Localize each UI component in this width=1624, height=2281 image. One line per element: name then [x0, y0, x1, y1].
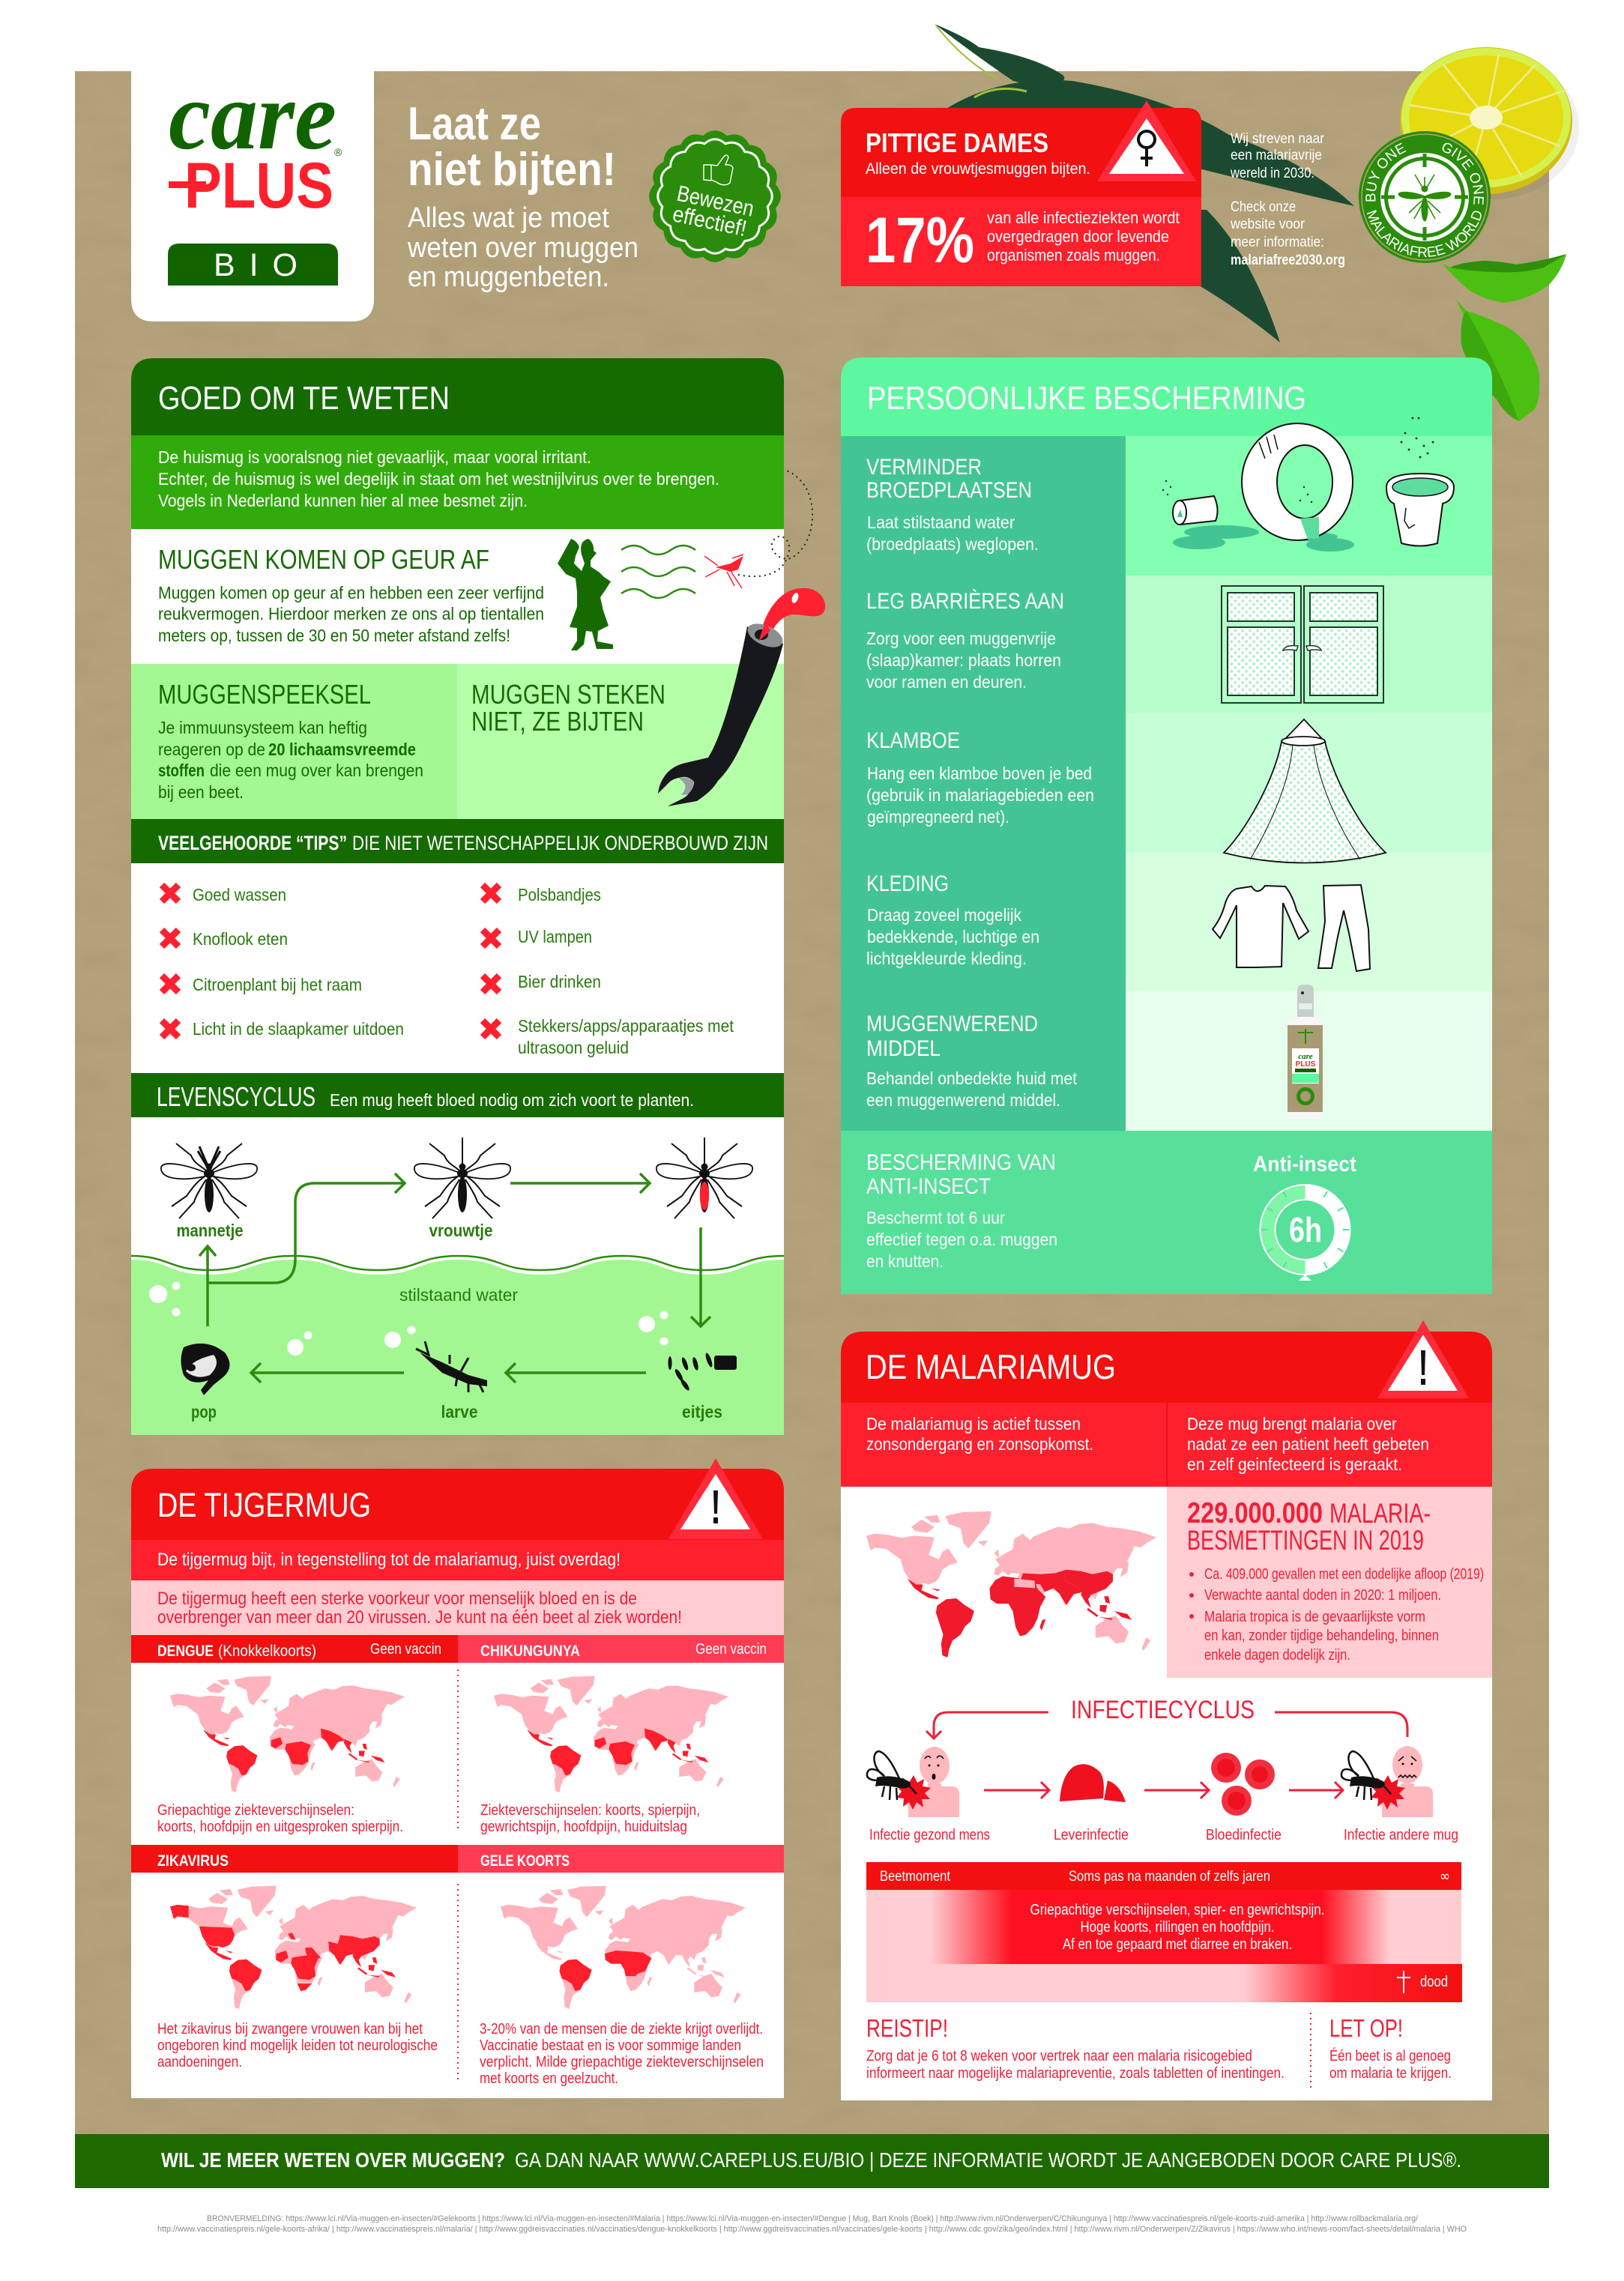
text: malariafree 2030: meer informatie:	[1231, 235, 1324, 250]
disease: zikavirus: ZIKAVIRUS	[157, 1852, 229, 1870]
panel: goed om te weten	[131, 358, 825, 1435]
labels: stilstaand water	[399, 1285, 518, 1305]
item: bescherming anti-insect	[841, 1131, 1492, 1294]
intro text: Echter, de huismug is wel degelijk in staat om het westnijlvirus over te brengen.	[158, 469, 719, 489]
panel: pittige dames	[841, 100, 1201, 286]
disease: zikavirus: ongeboren kind mogelijk leiden tot neurologische	[157, 2037, 438, 2054]
icon: thumb up	[704, 155, 733, 185]
section: muggenspeeksel: reageren op de	[158, 740, 265, 759]
heading: GOED OM TE WETEN	[158, 380, 450, 417]
intro text: Vogels in Nederland kunnen hier al mee besmet zijn.	[158, 491, 528, 510]
logo: plus: ®	[334, 146, 342, 158]
section: muggenspeeksel	[131, 664, 457, 819]
intro columns	[841, 1403, 1492, 1487]
item: bescherming anti-insect: ANTI-INSECT	[866, 1174, 991, 1199]
bar: levenscyclus: LEVENSCYCLUS	[157, 1081, 316, 1112]
badge: bewezen effectief: effectief!	[670, 202, 749, 241]
section: muggenspeeksel: Je immuunsysteem kan heftig	[158, 718, 367, 737]
tips list: Stekkers/apps/apparaatjes met	[518, 1016, 734, 1036]
heading	[841, 1332, 1492, 1403]
map: malaria	[841, 1487, 1167, 1678]
illustration: spray bottle: PLUS	[1296, 1060, 1316, 1069]
title: niet bijten!	[408, 144, 616, 196]
lemon	[1400, 47, 1579, 199]
arrows	[199, 1173, 710, 1383]
item: klamboe: Hang een klamboe boven je bed	[867, 764, 1092, 783]
tip: reistip: Zorg dat je 6 tot 8 weken voor vertrek naar een malaria risicogebied	[866, 2048, 1252, 2064]
labels: pop	[191, 1402, 217, 1422]
text: malariafree 2030: malariafree2030.org	[1231, 253, 1345, 268]
map: chikungunya	[494, 1676, 728, 1792]
heading	[131, 358, 784, 435]
dial value: 6h	[1289, 1210, 1322, 1249]
bar: levenscyclus: Een mug heeft bloed nodig om zich voort te planten.	[330, 1090, 694, 1110]
badge: buy one give one	[1359, 131, 1491, 263]
intro bars	[131, 1540, 784, 1635]
item: muggenwerend middel: een muggenwerend middel.	[866, 1090, 1060, 1110]
section: muggenspeeksel: stoffen	[158, 761, 205, 780]
disease: gele koorts	[458, 1845, 784, 2087]
section: muggenspeeksel: bij een beet.	[158, 782, 244, 802]
left column	[841, 436, 1126, 1131]
item: kleding	[866, 871, 1039, 968]
tips list: ultrasoon geluid	[518, 1038, 629, 1057]
disease: chikungunya: CHIKUNGUNYA	[480, 1643, 580, 1660]
statistics: MALARIA-	[1329, 1498, 1431, 1529]
mosquito: female	[414, 1138, 510, 1218]
text: malariafree 2030: website voor	[1230, 217, 1305, 232]
map: gele koorts	[501, 1886, 746, 2009]
tips list: Licht in de slaapkamer uitdoen	[193, 1019, 404, 1039]
badge: buy one give one: BUY ONE	[1365, 142, 1406, 201]
item: kleding: Draag zoveel mogelijk	[867, 905, 1021, 925]
badge: buy one give one: MALARIAFREE WORLD	[1367, 210, 1482, 258]
panel: pittige dames: van alle infectieziekten wordt	[987, 208, 1180, 227]
credits	[157, 2214, 1467, 2234]
mosquito: female with blood	[656, 1138, 752, 1218]
intro text: De huismug is vooralsnog niet gevaarlijk, maar vooral irritant.	[158, 447, 591, 467]
item: muggenwerend middel: MUGGENWEREND	[866, 1012, 1038, 1036]
person: sick	[1341, 1746, 1433, 1817]
heading: DE TIJGERMUG	[157, 1486, 371, 1524]
statistics: Malaria tropica is de gevaarlijkste vorm	[1204, 1609, 1425, 1625]
section: geur: meters op, tussen de 30 en 50 meter afstand zelfs!	[158, 626, 510, 645]
timeline: dood	[1420, 1974, 1448, 1990]
green leaves	[1443, 254, 1566, 421]
white base	[131, 1663, 784, 2098]
stage labels	[869, 1827, 1458, 1843]
tips list	[131, 863, 784, 1073]
panel: pittige dames: Alleen de vrouwtjesmuggen bijten.	[866, 160, 1090, 178]
title	[407, 98, 639, 293]
timeline: ∞	[1440, 1868, 1450, 1885]
item: muggenwerend middel: Behandel onbedekte huid met	[866, 1069, 1078, 1088]
section: steken: MUGGEN STEKEN	[471, 679, 665, 710]
item: broedplaatsen	[866, 455, 1039, 554]
bar: veelgehoorde tips: VEELGEHOORDE “TIPS”	[158, 832, 347, 854]
illustration: clothes	[1213, 885, 1370, 971]
bar: veelgehoorde tips: DIE NIET WETENSCHAPPELIJK ONDERBOUWD ZIJN	[352, 832, 768, 854]
section: geur: MUGGEN KOMEN OP GEUR AF	[158, 544, 489, 575]
footer band	[75, 2134, 1549, 2188]
credits: http://www.vaccinatiespreis.nl/gele-koorts-afrika/ | http://www.vaccinatiespreis.nl/malaria/ | http://www.ggdreisvaccinaties.nl/vaccinaties/dengue-knokkelkoorts | http://www.ggdreisvaccinaties.nl/vaccinaties/gele-koorts | http://www.cdc.gov/zika/geo/index.html | http://www.rivm.nl/Onderwerpen/Z/Zikavirus | https://www.who.int/news-room/fact-sheets/detail/malaria | WHO	[157, 2225, 1467, 2234]
item: kleding: lichtgekleurde kleding.	[866, 949, 1027, 968]
stage labels: Leverinfectie	[1054, 1827, 1129, 1843]
heading: DE MALARIAMUG	[866, 1347, 1116, 1386]
tips list: Knoflook eten	[193, 929, 288, 949]
illustration: standing water containers	[1162, 417, 1454, 552]
statistics: 229.000.000	[1187, 1497, 1323, 1529]
timeline: Af en toe gepaard met diarree en braken.	[1063, 1936, 1292, 1953]
logo: plus: PLUS	[184, 150, 333, 222]
white base	[841, 1678, 1492, 2100]
row backgrounds	[1126, 436, 1492, 1131]
item: kleding: KLEDING	[866, 871, 949, 896]
logo: bio pill	[168, 244, 338, 285]
disease: zikavirus: aandoeningen.	[157, 2054, 242, 2070]
text: malariafree 2030: wereld in 2030.	[1230, 166, 1314, 181]
panel: pittige dames: overgedragen door levende	[987, 227, 1169, 246]
text: malariafree 2030: Wij streven naar	[1231, 131, 1325, 147]
tip: reistip: REISTIP!	[866, 2014, 948, 2042]
infection cycle	[867, 1696, 1458, 1843]
disease: zikavirus	[131, 1845, 458, 2070]
item: bescherming anti-insect: effectief tegen o.a. muggen	[866, 1230, 1057, 1249]
title: en muggenbeten.	[408, 262, 609, 293]
illustration: spray bottle	[1288, 985, 1323, 1119]
disease: chikungunya: Ziekteverschijnselen: koorts, spierpijn,	[480, 1802, 700, 1819]
section: muggenspeeksel: 20 lichaamsvreemde	[268, 740, 416, 759]
icon: green mosquito	[1398, 175, 1451, 221]
section: geur: reukvermogen. Hierdoor merken ze ons al op tientallen	[158, 604, 544, 623]
tips list: Bier drinken	[518, 972, 601, 991]
text: malariafree 2030: een malariavrije	[1231, 148, 1322, 163]
heading: PERSOONLIJKE BESCHERMING	[867, 380, 1306, 417]
item: broedplaatsen: Laat stilstaand water	[867, 513, 1015, 532]
intro bars: overbrenger van meer dan 20 virussen. Je kunt na één beet al ziek worden!	[157, 1607, 682, 1628]
icon: warning triangle	[1377, 1320, 1469, 1398]
intro columns: De malariamug is actief tussen	[866, 1414, 1081, 1433]
disease: dengue: Geen vaccin	[370, 1641, 441, 1658]
tips list: Citroenplant bij het raam	[193, 975, 362, 994]
disease: gele koorts: 3-20% van de mensen die de ziekte krijgt overlijdt.	[480, 2021, 763, 2037]
icon: eggs	[668, 1353, 737, 1392]
heading	[131, 1469, 784, 1540]
icon: pupa	[181, 1344, 229, 1395]
map: dengue	[170, 1676, 405, 1792]
item: klamboe	[866, 728, 1094, 827]
tips list: Polsbandjes	[518, 885, 601, 904]
section: geur	[131, 529, 784, 664]
item: barrieres: LEG BARRIÈRES AAN	[866, 589, 1064, 614]
item: bescherming anti-insect: BESCHERMING VAN	[866, 1150, 1056, 1175]
icon: warning triangle	[668, 1458, 763, 1539]
statistics: enkele dagen dodelijk zijn.	[1204, 1647, 1350, 1664]
logo: care: care	[169, 62, 336, 170]
labels	[177, 1221, 722, 1422]
text: malariafree 2030: Check onze	[1231, 199, 1296, 215]
statistics: Verwachte aantal doden in 2020: 1 miljoen.	[1204, 1587, 1441, 1604]
disease: gele koorts: met koorts en geelzucht.	[480, 2070, 618, 2087]
tip: let op: Één beet is al genoeg	[1329, 2047, 1451, 2064]
disease: gele koorts: verplicht. Milde griepachtige ziekteverschijnselen	[480, 2054, 764, 2070]
title: Laat ze	[408, 98, 541, 150]
statistics: en kan, zonder tijdige behandeling, binnen	[1204, 1628, 1439, 1644]
stagnant water	[131, 1260, 784, 1435]
section: geur: Muggen komen op geur af en hebben een zeer verfijnd	[158, 583, 544, 602]
disease: dengue: DENGUE	[157, 1643, 214, 1660]
item: klamboe: KLAMBOE	[866, 728, 960, 753]
illustration: window with screens	[1222, 586, 1383, 703]
cycle arrows	[926, 1712, 1407, 1798]
timeline: Hoge koorts, rillingen en hoofdpijn.	[1081, 1919, 1274, 1936]
disease: dengue: koorts, hoofdpijn en uitgesproken spierpijn.	[157, 1819, 403, 1835]
disease: zikavirus: Het zikavirus bij zwangere vrouwen kan bij het	[157, 2021, 423, 2037]
tips list: Goed wassen	[193, 885, 286, 904]
tip: let op: om malaria te krijgen.	[1329, 2065, 1452, 2082]
item: barrieres	[866, 589, 1064, 692]
badge: bewezen effectief: Bewezen	[674, 181, 756, 222]
intro columns: nadat ze een patient heeft gebeten	[1187, 1434, 1429, 1454]
title: weten over muggen	[407, 232, 639, 264]
disease: dengue	[131, 1635, 458, 1835]
panel: pittige dames: organismen zoals muggen.	[987, 246, 1160, 265]
icon: warning female	[1097, 100, 1196, 181]
mosquito: male	[161, 1143, 257, 1218]
map: zikavirus	[170, 1886, 417, 2009]
panel: de malariamug	[841, 1320, 1492, 2100]
person: healthy	[867, 1747, 959, 1817]
section: steken	[457, 664, 784, 819]
intro columns: zonsondergang en zonsopkomst.	[866, 1434, 1093, 1454]
disease: gele koorts: Vaccinatie bestaat en is voor sommige landen	[480, 2037, 741, 2054]
bubbles	[149, 1281, 668, 1356]
disease: gele koorts: GELE KOORTS	[480, 1852, 570, 1870]
credits: BRONVERMELDING: https://www.lci.nl/Via-muggen-en-insecten/#Gelekoorts | https://www.lci.nl/Via-muggen-en-insecten/#Malaria | https://www.lci.nl/Via-muggen-en-insecten/#Dengue | Mug, Bart Knols (Boek) | http://www.rivm.nl/Onderwerpen/C/Chikungunya | http://www.vaccinatiespreis.nl/gele-koorts-zuid-amerika | http://www.rollbackmalaria.org/	[207, 2214, 1419, 2223]
icon: scent waves	[621, 546, 695, 598]
footer band: GA DAN NAAR WWW.CAREPLUS.EU/BIO | DEZE INFORMATIE WORDT JE AANGEBODEN DOOR CARE PLUS®.	[515, 2148, 1461, 2172]
intro bars: De tijgermug heeft een sterke voorkeur voor menselijk bloed en is de	[157, 1589, 637, 1609]
timeline: Griepachtige verschijnselen, spier- en gewrichtspijn.	[1030, 1902, 1325, 1918]
icon: larva	[416, 1341, 487, 1392]
life cycle diagram	[131, 1117, 784, 1435]
section: steken: NIET, ZE BIJTEN	[471, 706, 644, 737]
tip: reistip: informeert naar mogelijke malariapreventie, zoals tabletten of inentingen.	[866, 2065, 1285, 2082]
bar: levenscyclus	[131, 1073, 784, 1117]
item: bescherming anti-insect: en knutten.	[866, 1251, 944, 1271]
tips list: UV lampen	[518, 927, 592, 946]
tip: let op	[1329, 2014, 1452, 2082]
icon: man smelling	[558, 539, 613, 650]
item: broedplaatsen: BROEDPLAATSEN	[866, 478, 1032, 503]
panel: pittige dames: PITTIGE DAMES	[866, 127, 1048, 158]
disease: chikungunya: Geen vaccin	[695, 1641, 767, 1658]
logo: bio pill: BIO	[214, 247, 298, 283]
timeline: Beetmoment	[880, 1869, 951, 1885]
item: bescherming anti-insect: Anti-insect	[1253, 1152, 1356, 1176]
statistics: BESMETTINGEN IN 2019	[1187, 1525, 1424, 1556]
infection cycle: INFECTIECYCLUS	[1071, 1696, 1255, 1724]
tip: reistip	[866, 2014, 1285, 2082]
item: kleding: bedekkende, luchtige en	[867, 927, 1039, 946]
item: broedplaatsen: VERMINDER	[866, 455, 982, 480]
text: malariafree 2030	[1230, 131, 1345, 268]
badge: buy one give one: GIVE ONE	[1442, 142, 1484, 205]
icon: red mosquito with flight path	[704, 470, 812, 588]
logo card	[131, 62, 374, 321]
bar: veelgehoorde tips	[131, 819, 784, 863]
item: barrieres: Zorg voor een muggenvrije	[866, 629, 1056, 648]
stage labels: Bloedinfectie	[1206, 1827, 1282, 1843]
title: Alles wat je moet	[408, 202, 609, 234]
section: muggenspeeksel: die een mug over kan brengen	[210, 761, 423, 780]
item: klamboe: (gebruik in malariagebieden een	[866, 785, 1094, 805]
icon: proboscis with blood	[658, 588, 825, 806]
labels: mannetje	[177, 1221, 243, 1240]
eucalyptus leaves	[935, 24, 1354, 342]
timeline	[866, 1862, 1462, 2002]
item: barrieres: voor ramen en deuren.	[866, 672, 1027, 692]
footer band: WIL JE MEER WETEN OVER MUGGEN?	[161, 2148, 505, 2172]
intro columns: Deze mug brengt malaria over	[1187, 1414, 1397, 1433]
item: barrieres: (slaap)kamer: plaats horren	[866, 650, 1061, 670]
disease: dengue: (Knokkelkoorts)	[218, 1643, 316, 1660]
item: klamboe: geïmpregneerd net).	[867, 807, 1009, 827]
intro text	[131, 435, 784, 529]
panel: de tijgermug	[131, 1458, 784, 2098]
panel: pittige dames: 17%	[866, 205, 974, 277]
panel: persoonlijke bescherming	[841, 357, 1492, 1294]
disease: chikungunya: gewrichtspijn, hoofdpijn, huiduitslag	[480, 1819, 687, 1835]
stage labels: Infectie gezond mens	[869, 1827, 990, 1843]
badge: bewezen effectief	[649, 130, 781, 262]
heading	[841, 357, 1492, 436]
item: muggenwerend middel: MIDDEL	[866, 1036, 941, 1061]
intro bars: De tijgermug bijt, in tegenstelling tot de malariamug, juist overdag!	[157, 1550, 621, 1570]
icon: blood cells	[1211, 1753, 1275, 1816]
disease: chikungunya	[458, 1635, 784, 1835]
item: bescherming anti-insect: Beschermt tot 6 uur	[866, 1208, 1005, 1227]
stage labels: Infectie andere mug	[1344, 1827, 1458, 1843]
labels: vrouwtje	[429, 1221, 493, 1240]
item: broedplaatsen: (broedplaats) weglopen.	[866, 534, 1039, 554]
timeline: Soms pas na maanden of zelfs jaren	[1069, 1869, 1270, 1885]
illustration: spray bottle: care	[1298, 1052, 1313, 1061]
icon: 6 hour dial	[1261, 1185, 1350, 1281]
item: muggenwerend middel	[866, 1012, 1078, 1110]
tip: let op: LET OP!	[1329, 2014, 1403, 2042]
disease: dengue: Griepachtige ziekteverschijnselen:	[157, 1802, 354, 1819]
labels: eitjes	[682, 1402, 722, 1422]
section: muggenspeeksel: MUGGENSPEEKSEL	[158, 679, 371, 710]
labels: larve	[441, 1402, 478, 1422]
icon: liver	[1060, 1764, 1126, 1802]
statistics: Ca. 409.000 gevallen met een dodelijke afloop (2019)	[1204, 1566, 1484, 1583]
illustration: mosquito net	[1224, 719, 1386, 863]
intro columns: en zelf geinfecteerd is geraakt.	[1187, 1454, 1402, 1474]
statistics	[1167, 1487, 1492, 1678]
